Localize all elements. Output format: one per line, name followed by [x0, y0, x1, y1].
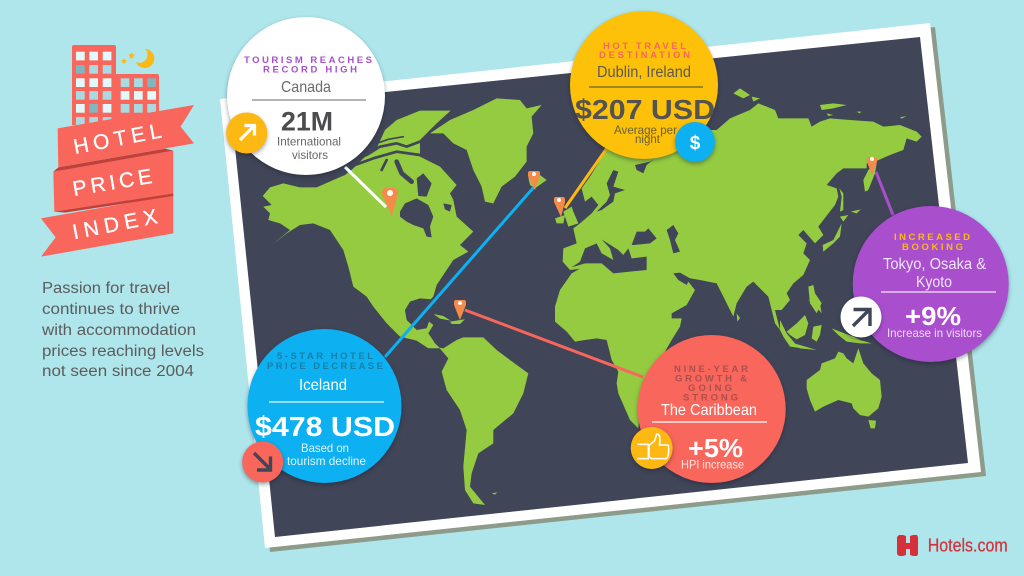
- icon: up arrow badge: [840, 296, 882, 338]
- stat caption: night: [635, 132, 661, 146]
- stat caption: International: [277, 135, 341, 149]
- icon: H mark: [897, 535, 918, 556]
- callout heading: TOURISM REACHES: [244, 55, 372, 66]
- callout: caribbean: [631, 335, 786, 483]
- icon: thumbs up badge: [631, 427, 673, 469]
- connector: iceland: [385, 187, 534, 357]
- callout heading: 5-STAR HOTEL: [277, 351, 373, 362]
- stat caption: HPI increase: [681, 458, 744, 472]
- ribbon text: index: INDEX: [71, 205, 159, 244]
- intro text block: continues to thrive: [42, 301, 180, 318]
- callout heading: [599, 41, 690, 61]
- icon: dollar badge: $: [690, 133, 701, 154]
- icon: moon and stars: [121, 49, 154, 68]
- south america: [425, 337, 528, 505]
- pin: caribbean: [454, 300, 466, 320]
- stat caption: [277, 135, 341, 162]
- stat: +5%: +5%: [688, 433, 743, 463]
- caribbean islands: [433, 314, 451, 321]
- callout heading: PRICE DECREASE: [267, 361, 383, 372]
- stat: $478 USD: $478 USD: [255, 411, 395, 442]
- intro text block: prices reaching levels: [42, 343, 204, 360]
- callout heading: GROWTH &: [675, 374, 747, 385]
- pin: dublin: [554, 197, 565, 217]
- location name: The Caribbean: [661, 402, 757, 419]
- callout heading: HOT TRAVEL: [603, 41, 686, 52]
- callout heading: NINE-YEAR: [674, 364, 748, 375]
- pin: canada: [382, 188, 398, 216]
- pin: iceland: [528, 171, 540, 190]
- connector: dublin: [565, 148, 607, 208]
- stat caption: visitors: [292, 148, 328, 162]
- callout heading: RECORD HIGH: [263, 65, 357, 76]
- stat caption: Based on: [301, 441, 349, 455]
- connector: caribbean: [465, 310, 643, 377]
- stat caption: [287, 441, 366, 468]
- europe: [555, 127, 730, 280]
- inland seas: [572, 158, 680, 273]
- location name: Tokyo, Osaka &: [883, 256, 986, 273]
- callout heading: [674, 364, 748, 404]
- world map panel: [220, 23, 986, 552]
- ribbon text: hotel: HOTEL: [72, 120, 163, 159]
- stat: 21M: 21M: [281, 106, 333, 136]
- stat caption: Average per: [614, 123, 677, 137]
- southeast asia and australia: [780, 300, 882, 428]
- greenland: [430, 98, 542, 203]
- connector: japan: [876, 172, 893, 215]
- hudson bay: [400, 198, 433, 237]
- ribbon text: price: PRICE: [71, 165, 154, 201]
- location name: Kyoto: [916, 274, 952, 291]
- icon: hotel building: [72, 45, 159, 125]
- location name: Dublin, Ireland: [597, 64, 691, 81]
- intro text block: [41, 280, 204, 380]
- callout heading: INCREASED: [894, 232, 970, 243]
- connector: canada: [345, 167, 386, 207]
- ribbon banner: [41, 105, 194, 257]
- callout heading: [244, 55, 372, 76]
- callout: iceland: [242, 329, 402, 483]
- asia: [680, 88, 922, 330]
- location name: Canada: [281, 79, 331, 96]
- callout heading: STRONG: [683, 393, 738, 404]
- africa: [555, 263, 698, 428]
- icon: down arrow badge: [242, 442, 283, 482]
- hotels.com logo: [897, 535, 1008, 556]
- intro text block: with accommodation: [41, 322, 196, 339]
- stat: $207 USD: $207 USD: [575, 94, 715, 125]
- wordmark: Hotels.com: [928, 536, 1008, 556]
- callout heading: DESTINATION: [599, 50, 690, 61]
- callout: canada: [226, 17, 385, 175]
- stat caption: [614, 123, 677, 146]
- callout heading: [894, 232, 970, 253]
- stat: +9%: +9%: [905, 301, 961, 331]
- callout heading: GOING: [688, 383, 732, 394]
- callout heading: [267, 351, 383, 372]
- location name: Iceland: [299, 377, 347, 394]
- icon: up arrow badge: [226, 112, 267, 154]
- iceland: [528, 175, 547, 188]
- stat caption: tourism decline: [287, 454, 366, 468]
- arctic channels: [355, 137, 420, 182]
- pin: japan: [867, 157, 877, 175]
- hotel price index logo: [41, 45, 194, 257]
- icon: dollar badge: [675, 122, 715, 162]
- intro text block: Passion for travel: [42, 280, 170, 297]
- intro text block: not seen since 2004: [42, 363, 194, 380]
- callout: japan: [840, 206, 1009, 362]
- callout: dublin: [570, 11, 718, 162]
- stat caption: Increase in visitors: [887, 326, 982, 340]
- location name: [883, 256, 986, 291]
- north america: [263, 98, 547, 348]
- callout heading: BOOKING: [902, 242, 963, 253]
